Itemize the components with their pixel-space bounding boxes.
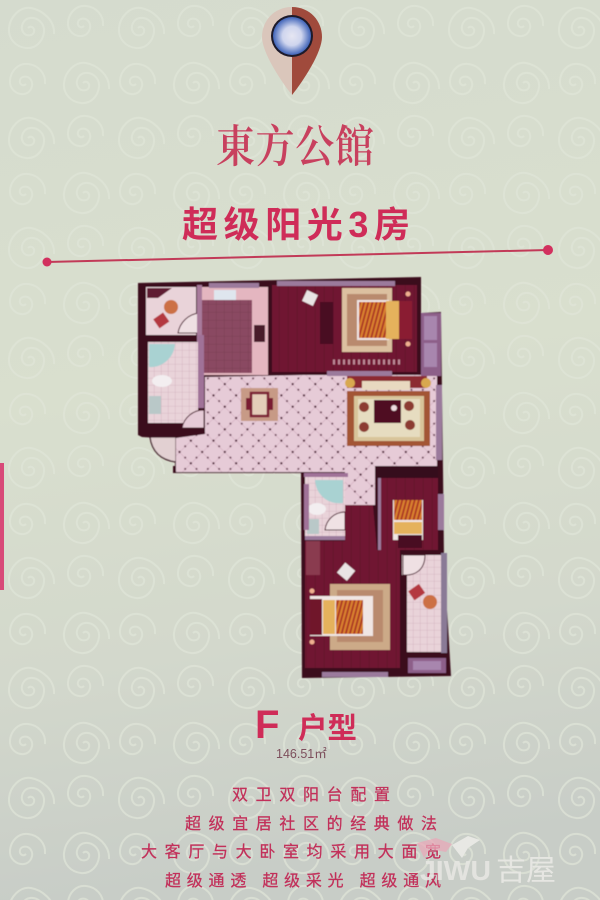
heading: super sunshine three-bedroom: 超级阳光3房 <box>182 204 410 245</box>
balcony: air conditioner ledge <box>421 313 441 376</box>
room: kitchen <box>197 285 268 375</box>
furniture: sofa and living room carpet <box>345 376 431 446</box>
text block: selling points: 超级通透 超级采光 超级通风 <box>165 872 441 890</box>
room: east small bedroom <box>376 466 444 550</box>
room: north bedroom <box>272 285 417 372</box>
room: top-left balcony <box>146 287 199 335</box>
unit area: 146.51㎡ <box>276 747 327 761</box>
furniture: dining table with rug <box>241 388 278 421</box>
text block: selling points <box>141 786 441 890</box>
watermark: JIWU 吉屋: JIWU <box>420 855 491 886</box>
floor plan <box>138 277 451 678</box>
divider line with end dots <box>42 245 553 266</box>
room: window trim top <box>209 281 442 460</box>
room: south bathroom <box>304 473 348 540</box>
unit type label <box>255 703 357 747</box>
room: south bedroom <box>305 505 400 677</box>
unit type label: 户型 <box>298 712 357 745</box>
room: west bathroom <box>148 335 204 428</box>
plan: outer walls <box>138 277 451 678</box>
watermark: JIWU 吉屋 <box>417 836 556 887</box>
text block: selling points: 大客厅与大卧室均采用大面宽 <box>141 843 441 861</box>
watermark: JIWU 吉屋: 吉屋 <box>496 854 556 887</box>
room: east balcony <box>400 553 447 673</box>
room: living and dining tiled floor <box>176 375 437 505</box>
plan: entry balcony door arc <box>150 437 176 462</box>
text block: selling points: 双卫双阳台配置 <box>232 786 390 804</box>
text block: selling points: 超级宜居社区的经典做法 <box>185 815 437 833</box>
title: brand name: 東方公館 <box>216 112 374 176</box>
icon: location pin with gem <box>262 7 322 95</box>
unit type label: F <box>255 703 279 747</box>
